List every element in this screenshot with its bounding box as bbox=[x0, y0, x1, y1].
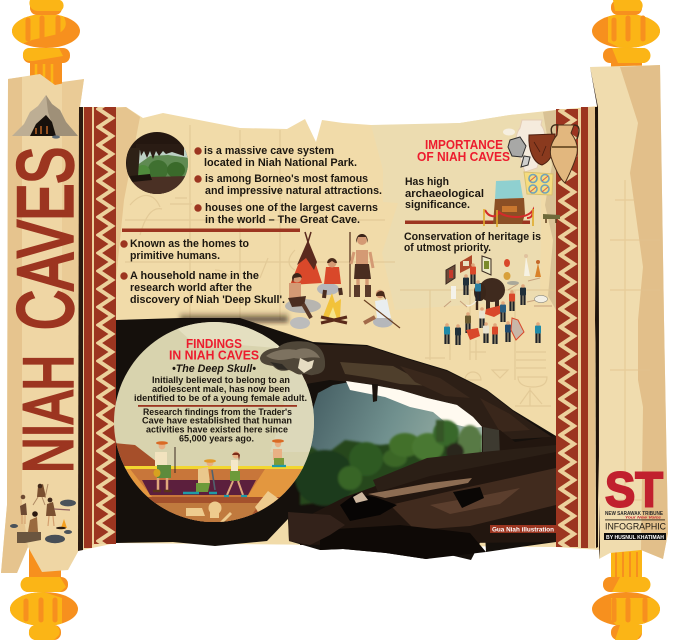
illustration: museum crowd bbox=[444, 254, 552, 345]
bones and fossils bbox=[186, 491, 279, 524]
text: archaeological significance bbox=[405, 176, 484, 211]
visitors bbox=[444, 263, 541, 345]
text: what Niah Caves is: and impressive natural attractions. bbox=[205, 185, 382, 197]
heading: importance of Niah Caves: IMPORTANCE bbox=[425, 137, 503, 152]
text: what Niah Caves is: houses one of the largest caverns bbox=[205, 202, 378, 214]
text: research findings: activities have existed here since bbox=[146, 424, 288, 434]
text: conservation of heritage: Conservation of heritage is bbox=[404, 231, 541, 243]
heading: findings: IN NIAH CAVES bbox=[169, 348, 259, 362]
hieroglyph background bbox=[125, 125, 555, 406]
logo: ST New Sarawak Tribune infographic: BY HUSNUL KHATIMAH bbox=[606, 535, 664, 541]
text: initial belief bbox=[134, 375, 307, 403]
logo: ST New Sarawak Tribune infographic: NEW SARAWAK TRIBUNE bbox=[605, 511, 663, 517]
panel: right scroll strip bbox=[590, 65, 668, 559]
column: top left bbox=[12, 0, 80, 88]
text: primitive humans and Deep Skull: Known as the homes to bbox=[130, 238, 249, 250]
seated woman bbox=[364, 290, 400, 328]
rock ledge and floor bbox=[300, 427, 556, 545]
text: what Niah Caves is: is a massive cave system bbox=[204, 145, 334, 157]
exhibition ropes bbox=[444, 278, 552, 307]
text: initial belief: identified to be of a young female adult. bbox=[134, 393, 307, 403]
text: initial belief: adolescent male, has now been bbox=[152, 384, 290, 394]
cave ceiling bbox=[300, 344, 552, 440]
excavation ground bbox=[124, 467, 304, 522]
image: deep skull fossil bbox=[260, 341, 325, 375]
text: archaeological significance: significance. bbox=[405, 199, 470, 211]
text: research findings: Research findings from the Trader's bbox=[143, 407, 292, 417]
heading: importance of Niah Caves bbox=[417, 137, 510, 164]
trees bbox=[295, 420, 482, 506]
logo: ST New Sarawak Tribune infographic: Your New Voice bbox=[625, 516, 661, 520]
illustration: pottery artefacts bbox=[503, 120, 579, 183]
band: left zigzag border bbox=[94, 107, 116, 544]
forest opening bbox=[303, 382, 482, 497]
white column bbox=[451, 286, 456, 299]
cave photo illustration bbox=[116, 318, 556, 560]
text: primitive humans and Deep Skull bbox=[120, 238, 285, 306]
illustration: cave people camp bbox=[285, 232, 400, 329]
archaeologists bbox=[153, 439, 286, 496]
text: primitive humans and Deep Skull: discovery of Niah 'Deep Skull'. bbox=[130, 294, 285, 306]
text: research findings bbox=[142, 407, 292, 444]
text: conservation of heritage: of utmost priority. bbox=[404, 242, 491, 254]
title: Niah Caves: NIAH bbox=[9, 355, 87, 473]
text: primitive humans and Deep Skull: A household name in the bbox=[130, 270, 259, 282]
illustration: museum display case bbox=[484, 180, 560, 227]
panel: main parchment bbox=[78, 106, 600, 551]
text: what Niah Caves is: is among Borneo's most famous bbox=[205, 173, 368, 185]
logo: ST New Sarawak Tribune infographic: INFOGRAPHIC bbox=[605, 522, 667, 532]
bullet: massive cave system bbox=[194, 147, 202, 155]
text: primitive humans and Deep Skull: primitive humans. bbox=[130, 250, 220, 262]
icon: artefact card bbox=[524, 172, 553, 195]
seated figure left bbox=[285, 273, 321, 329]
text: research findings: Cave have established that human bbox=[142, 416, 292, 426]
icon: cave mountain bbox=[12, 95, 78, 139]
icon: prehistoric family, left strip bbox=[10, 484, 76, 543]
paintings bbox=[446, 255, 491, 284]
heading: findings: FINDINGS bbox=[186, 337, 242, 351]
heading: findings bbox=[169, 337, 259, 362]
title: Niah Caves bbox=[3, 147, 89, 473]
text: research findings: 65,000 years ago. bbox=[179, 434, 254, 444]
logo: ST New Sarawak Tribune infographic: ST bbox=[605, 464, 663, 518]
seated figure middle bbox=[317, 258, 341, 298]
band: right zigzag border bbox=[556, 107, 595, 548]
column: bottom left bbox=[8, 545, 78, 640]
title: Niah Caves: CAVES bbox=[3, 147, 89, 330]
standing man bbox=[350, 232, 373, 297]
subheading: the deep skull: •The Deep Skull• bbox=[172, 363, 256, 375]
text: archaeological significance: archaeological bbox=[405, 188, 484, 200]
column: bottom right bbox=[592, 548, 663, 640]
photo: cave mouth circle bbox=[126, 132, 190, 196]
logo: ST New Sarawak Tribune infographic bbox=[604, 464, 667, 541]
text: what Niah Caves is: in the world – The Great Cave. bbox=[205, 214, 360, 226]
text: initial belief: Initially believed to belong to an bbox=[152, 375, 290, 385]
text: archaeological significance: Has high bbox=[405, 176, 449, 188]
statues bbox=[504, 254, 541, 285]
fold shadow under paper bbox=[180, 312, 288, 322]
text: primitive humans and Deep Skull: research world after the bbox=[130, 282, 252, 294]
text: conservation of heritage bbox=[404, 231, 541, 254]
text: what Niah Caves is: located in Niah National Park. bbox=[204, 157, 357, 169]
heading: importance of Niah Caves: OF NIAH CAVES bbox=[417, 149, 510, 164]
dark fold line and stripes bbox=[78, 107, 83, 551]
campfire bbox=[321, 293, 347, 323]
text: what Niah Caves is bbox=[194, 145, 382, 226]
panel: left scroll strip bbox=[1, 74, 94, 573]
panel: findings circle bbox=[114, 322, 314, 527]
tipi bbox=[290, 232, 322, 285]
caption: Gua Niah illustration: Gua Niah illustration bbox=[492, 527, 554, 534]
column: top right bbox=[592, 0, 662, 70]
mammoth bbox=[466, 278, 505, 317]
bright sky bbox=[346, 381, 482, 428]
